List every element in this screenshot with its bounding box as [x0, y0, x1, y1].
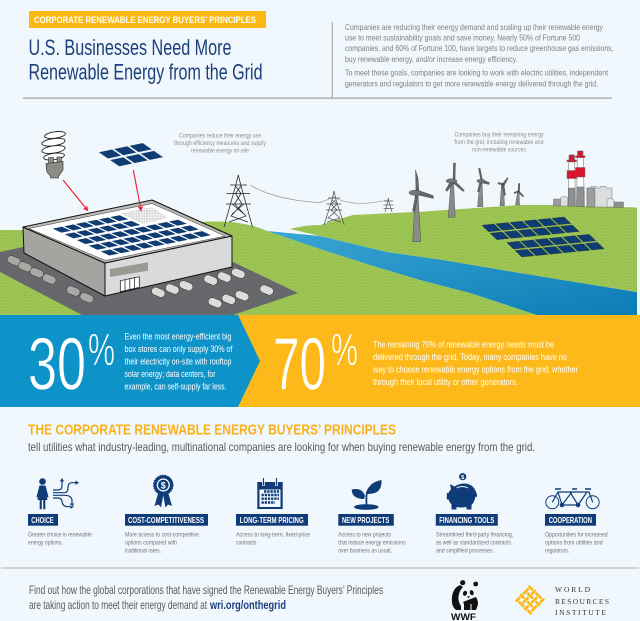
- building: [23, 200, 232, 296]
- description: long-term pricing: [236, 531, 310, 546]
- header: [23, 11, 614, 99]
- caption: grid energy: non-renewable sources: [472, 146, 526, 154]
- stippled roof area: [120, 207, 168, 224]
- label: cost-competitiveness: COST-COMPETITIVENESS: [128, 515, 204, 525]
- description: financing tools: Streamlined third-party financing,: [436, 531, 513, 538]
- description: choice: Greater choice in renewable: [28, 531, 92, 538]
- description: new projects: [338, 531, 406, 554]
- icon: light bulb: [41, 130, 66, 178]
- stat: 30%: %: [88, 324, 115, 375]
- icon: piggy bank: $: [461, 475, 464, 481]
- stat: 30%: 30: [28, 322, 86, 405]
- description: new projects: over business as usual.: [338, 548, 392, 554]
- principle: cooperation: [545, 489, 608, 554]
- text: 30 percent explanation: [124, 332, 233, 392]
- principle: long-term pricing: [236, 478, 310, 546]
- description: long-term pricing: Access to long-term, fixed-price: [236, 531, 310, 538]
- label: choice: CHOICE: [31, 515, 54, 525]
- WRI wordmark: RESOURCES: [555, 597, 609, 606]
- stat: 70%: %: [331, 324, 358, 375]
- footer text: [29, 583, 383, 612]
- WRI weave mark: [514, 584, 546, 616]
- stat: 70%: 70: [273, 322, 326, 405]
- principles subheading: tell utilities what industry-leading, multinational companies are looking for when buying renewable energy from the grid.: [28, 440, 535, 454]
- icon: floating solar panel: [97, 142, 166, 167]
- description: cooperation: regulators.: [545, 548, 569, 554]
- text: 30 percent explanation: their electricity on-site with rooftop: [124, 356, 232, 368]
- text: 70 percent explanation: The remaining 70% of renewable energy needs must be: [373, 340, 554, 350]
- footer text: wri.org/onthegrid: [209, 598, 286, 612]
- icon: dollar ribbon: $: [161, 480, 166, 490]
- footer text: are taking action to meet their energy demand at: [29, 598, 207, 612]
- rooftop solar panels: [50, 214, 214, 256]
- principle: new projects: [338, 480, 406, 554]
- intro text: buy renewable energy, and/or increase energy efficiency.: [345, 54, 518, 64]
- power plant: [554, 151, 624, 208]
- arrow: panel to roof: [133, 170, 141, 210]
- description: cooperation: Opportunities for increased: [545, 531, 608, 538]
- turbine 3: [477, 168, 490, 207]
- principle: financing tools: [436, 473, 513, 554]
- cars: [6, 254, 275, 309]
- description: financing tools: [436, 531, 513, 554]
- description: long-term pricing: contracts.: [236, 540, 258, 546]
- description: cost-competitiveness: traditional rates.: [125, 548, 161, 554]
- turbine 5: [514, 184, 524, 205]
- label: new projects: NEW PROJECTS: [342, 515, 390, 525]
- arrow: bulb to roof: [63, 180, 87, 210]
- description: cost-competitiveness: options compared with: [125, 540, 177, 546]
- text: 70 percent explanation: way to choose renewable energy options from the grid, whether: [372, 364, 578, 376]
- intro text: [345, 22, 614, 88]
- principles heading: THE CORPORATE RENEWABLE ENERGY BUYERS’ PRINCIPLES: [28, 422, 396, 438]
- label: financing tools: FINANCING TOOLS: [439, 515, 495, 525]
- WRI wordmark: WORLD: [555, 585, 591, 594]
- turbine 4: [498, 178, 508, 206]
- description: cost-competitiveness: [125, 531, 199, 554]
- turbine 2: [446, 163, 464, 217]
- label: long-term pricing: LONG-TERM PRICING: [240, 515, 304, 525]
- smokestack left: [567, 155, 576, 206]
- description: new projects: Access to new projects: [338, 531, 392, 538]
- text: 30 percent explanation: box stores can only supply 30% of: [124, 344, 233, 355]
- river: [267, 231, 637, 315]
- description: cost-competitiveness: More access to cost-competitive: [125, 531, 199, 538]
- banner: corporate renewable energy buyers' principles: CORPORATE RENEWABLE ENERGY BUYERS’ PRINCIPLES: [34, 15, 256, 26]
- text: 30 percent explanation: solar energy; data centers, for: [124, 369, 216, 380]
- caption: on-site energy: renewable energy on-site: [191, 148, 249, 154]
- caption: on-site energy: [174, 132, 267, 154]
- icon: sprout: [352, 480, 382, 510]
- field solar array: front: [506, 234, 606, 258]
- description: cooperation: options from utilities and: [545, 540, 603, 546]
- icon: person with arrows: [36, 478, 79, 509]
- far hill: [290, 205, 637, 292]
- title: Renewable Energy from the Grid: [28, 60, 262, 84]
- text: 30 percent explanation: example, can self-supply far less.: [124, 382, 226, 392]
- foreground ground: [0, 221, 537, 315]
- band: 70 percent: [0, 315, 640, 407]
- WRI wordmark: INSTITUTE: [555, 608, 606, 617]
- principle: cost-competitiveness: [125, 475, 208, 554]
- building door: [120, 277, 139, 292]
- logo: World Resources Institute: [514, 584, 609, 617]
- banner: corporate renewable energy buyers' principles: [29, 11, 266, 28]
- text: 70 percent explanation: [372, 340, 578, 388]
- label: cooperation: COOPERATION: [549, 515, 592, 525]
- icon: calendar: [257, 478, 283, 509]
- caption: on-site energy: through efficiency measures and supply: [174, 140, 267, 147]
- description: financing tools: as well as standardized contracts: [436, 540, 512, 546]
- text: 70 percent explanation: through their local utility or other generators.: [373, 377, 518, 388]
- building sign: [110, 262, 148, 277]
- band: 30 percent: [0, 315, 260, 407]
- tower: large: [224, 175, 252, 227]
- illustration: landscape: [0, 130, 637, 315]
- smokestack right: [576, 151, 585, 206]
- WRI wordmark: [555, 585, 609, 617]
- description: cooperation: [545, 531, 608, 554]
- caption: grid energy: from the grid, including renewable and: [454, 139, 544, 146]
- caption: grid energy: [454, 132, 544, 154]
- turbine 1: [409, 170, 434, 242]
- icon: tandem bicycle: [546, 489, 599, 509]
- field solar array: back: [480, 216, 581, 241]
- title: U.S. Businesses Need More: [28, 35, 232, 60]
- principle: choice: [28, 478, 92, 546]
- text: 30 percent explanation: Even the most energy-efficient big: [124, 332, 232, 342]
- tower: medium: [324, 191, 344, 225]
- wind turbines: [409, 163, 524, 242]
- caption: on-site energy: Companies reduce their energy use: [179, 132, 261, 140]
- transmission towers and wires: [224, 175, 394, 227]
- description: choice: energy options.: [28, 540, 63, 546]
- footer text: Find out how the global corporations that have signed the Renewable Energy Buyers’ Principles: [29, 583, 383, 597]
- parking lot: [0, 230, 298, 315]
- intro text: use to meet sustainability goals and save money. Nearly 50% of Fortune 500: [345, 32, 580, 42]
- description: new projects: that reduce energy emissions: [338, 540, 406, 546]
- description: financing tools: and simplified processes.: [436, 548, 494, 554]
- description: choice: [28, 531, 92, 546]
- title: [28, 35, 262, 84]
- logo: WWF panda: [451, 580, 478, 621]
- caption: grid energy: Companies buy their remaining energy: [454, 132, 544, 138]
- tower: small: [384, 198, 394, 212]
- text: 70 percent explanation: delivered through the grid. Today, many companies have no: [373, 352, 567, 363]
